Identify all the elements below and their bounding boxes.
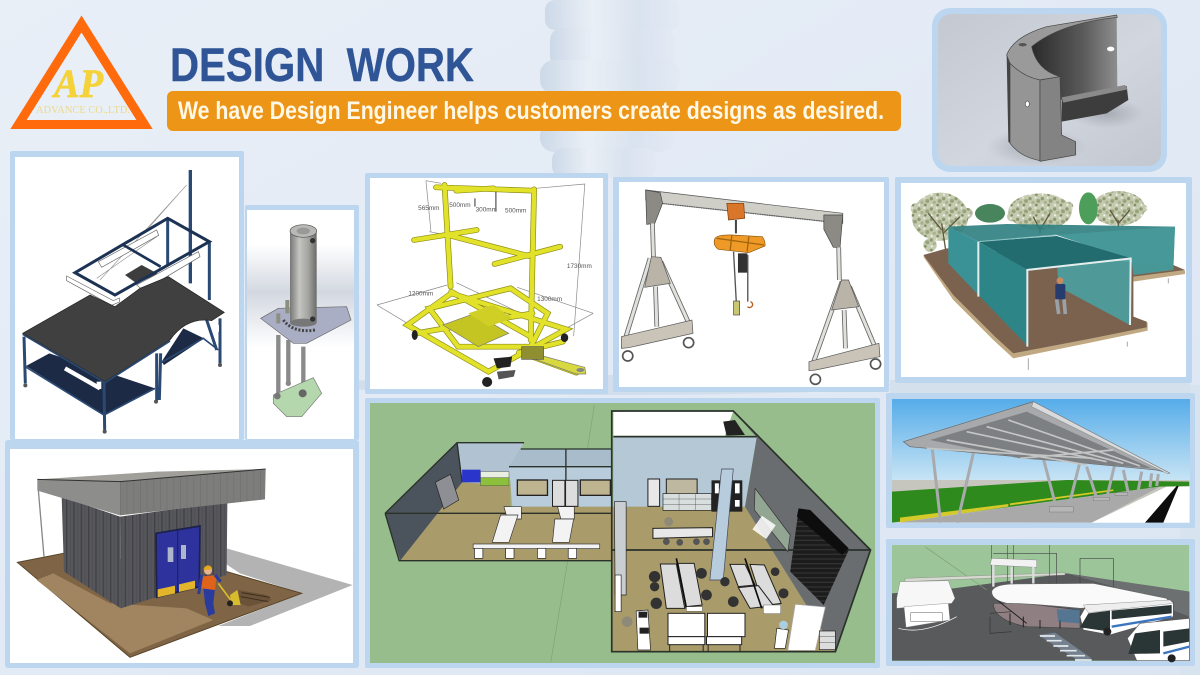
panel: yellow trolley frame with dimensions [365,173,608,394]
left room [385,443,612,561]
panel: yellow trolley frame with dimensions: 565mm [418,205,440,212]
right room [612,411,871,652]
logo: AP Advance Co., Ltd.: ADVANCE CO.,LTD. [36,105,130,116]
panel: workbench with overhead frame [10,151,244,440]
panel: prefab building with worker [5,440,359,668]
panel: yellow trolley frame with dimensions: 1730mm [567,263,592,270]
panel: yellow trolley frame with dimensions: 300mm [476,206,497,213]
title: DESIGN WORK [170,38,474,91]
subtitle banner [167,91,901,131]
panel: curved bearing part render [932,8,1167,172]
panel: yellow trolley frame with dimensions: 500mm [505,208,526,215]
panel: bus station concept [886,539,1195,666]
logo: AP Advance Co., Ltd. [18,24,144,124]
panel: yellow trolley frame with dimensions: 1300mm [537,296,562,303]
panel: solar carport [886,393,1195,528]
logo: AP Advance Co., Ltd.: AP [51,61,104,106]
panel: yellow trolley frame with dimensions: 500mm [449,202,471,209]
subtitle banner: We have Design Engineer helps customers create designs as desired. [178,97,884,125]
panel: portable gantry crane with hoist [613,177,889,392]
panel: yellow trolley frame with dimensions: 1200mm [408,291,433,298]
panel: teal netted enclosure with trees and person [895,177,1192,383]
panel: office floor plan model [365,398,880,668]
panel: hydraulic cylinder assembly [245,205,359,440]
